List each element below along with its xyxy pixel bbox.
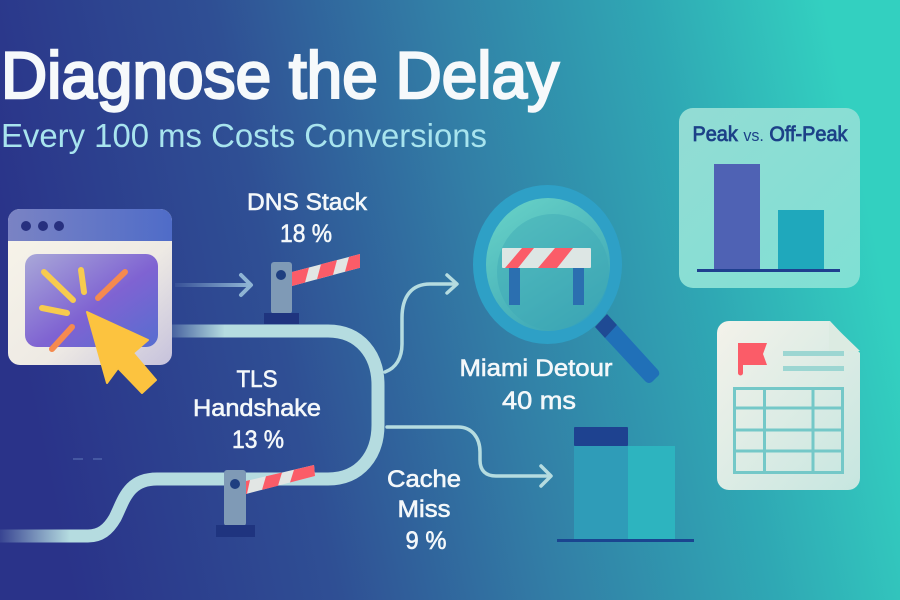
label: Cache Miss: 9 % — [406, 527, 446, 555]
label: DNS Stack: DNS Stack — [247, 189, 368, 216]
bar: off-peak — [778, 210, 824, 270]
chart heading: Peak vs. Off-Peak — [692, 123, 848, 146]
main network track — [0, 331, 378, 536]
label: Cache Miss: Miss — [398, 496, 450, 523]
label: DNS Stack: 18 % — [280, 220, 332, 248]
label: TLS Handshake — [193, 366, 321, 454]
subtitle: Every 100 ms Costs Conversions — [1, 117, 487, 154]
label: TLS Handshake: 13 % — [232, 426, 284, 454]
icon: report document with flag and table — [717, 321, 860, 490]
icon: cache bars — [557, 427, 694, 542]
title: Diagnose the Delay — [1, 38, 559, 112]
label: TLS Handshake: TLS — [236, 366, 278, 393]
icon: DNS barrier gate — [264, 254, 360, 324]
label: DNS Stack — [247, 189, 368, 248]
icon: browser window with click — [8, 209, 172, 393]
label: Miami Detour: 40 ms — [502, 387, 576, 415]
label: Miami Detour — [460, 355, 613, 415]
panel: Peak vs. Off-Peak chart — [679, 108, 860, 288]
label: Cache Miss: Cache — [387, 466, 461, 493]
magnifying glass with barricade — [473, 185, 659, 383]
label: Cache Miss — [387, 466, 461, 555]
bar: peak — [714, 164, 760, 270]
decorative marks — [73, 458, 102, 460]
arrow: track to Miami detour — [385, 275, 457, 372]
icon: TLS barrier gate — [216, 465, 315, 537]
label: Miami Detour: Miami Detour — [460, 355, 613, 382]
arrow: browser to DNS — [175, 275, 251, 295]
arrow: track to cache bars — [387, 427, 551, 486]
label: TLS Handshake: Handshake — [193, 395, 321, 422]
